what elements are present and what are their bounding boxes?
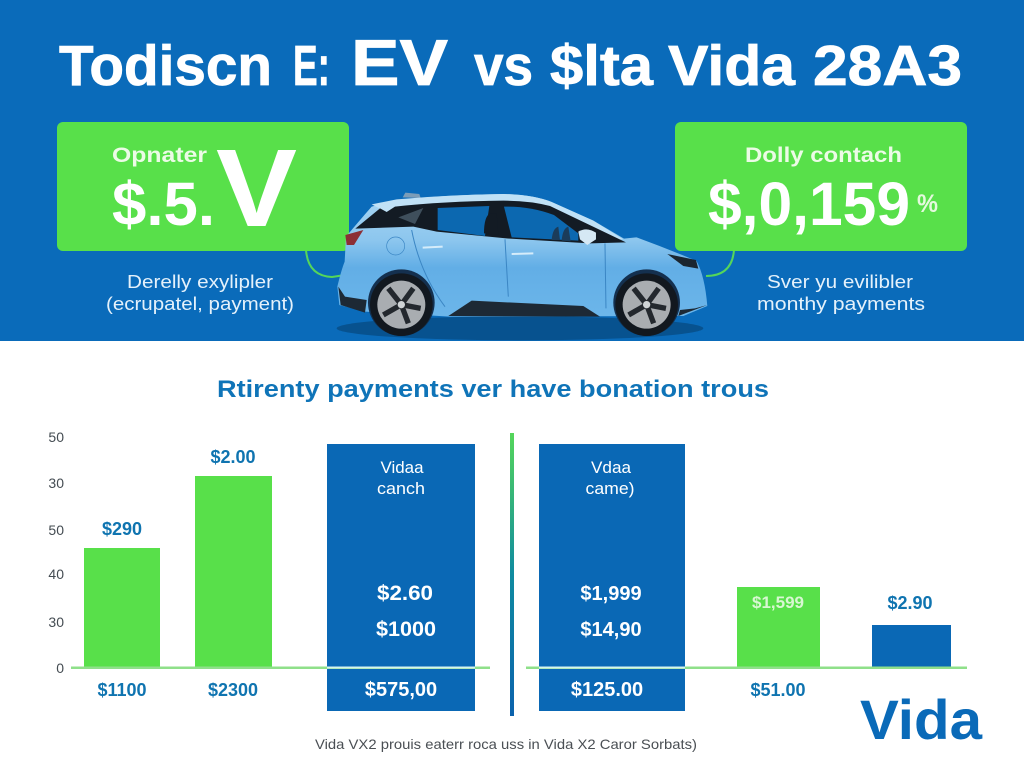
title: Vida [668,34,796,98]
right baseline [526,666,967,669]
baseline across blue bar [327,666,475,668]
callout label: Dolly contach: Dolly contach [745,144,902,167]
panel: right callout [675,122,967,251]
callout label: Opnater: Opnater [112,144,207,167]
y axis labels: 50 [48,429,64,445]
blue bar labels: $575,00 [365,679,437,701]
bar chart: right: $2.90 [887,593,933,613]
bar: blue $2.90 [872,625,951,668]
car roof highlight [372,194,623,239]
chart heading: Rtirenty payments ver have bonation trous [217,376,769,403]
illustration: blue electric car [337,193,707,340]
rear wheel [368,269,435,336]
tail light [345,230,363,245]
footnote: Vida VX2 prouis eaterr roca uss in Vida X2 Caror Sorbats) [315,736,697,752]
value labels: $1100 [97,680,147,700]
car body [337,194,707,317]
rear seat silhouette [484,213,498,235]
title: $lta [550,34,654,98]
blue bar labels: $1,999 [580,583,642,605]
bar: green $2.00 [195,476,272,668]
bar: blue Vida canch [327,444,475,711]
value labels: $2.00 [210,447,256,467]
callout value: $,0,159: $,0,159 [708,170,910,238]
title: vs [474,34,533,98]
blue bar labels: Vdaa [591,458,632,477]
y axis labels: 40 [48,566,64,582]
y axis labels: 50 [48,522,64,538]
bar chart: right: $51.00 [750,680,806,700]
left baseline [71,666,490,669]
title: EV [351,26,448,99]
baseline across blue bar [539,666,685,668]
text block: right caption: Sver yu evilibler [767,271,913,292]
bar chart: left [71,444,490,711]
car roof antenna [403,193,421,198]
blue bar labels: $2.60 [377,582,433,605]
blue bar labels: $1000 [376,618,436,641]
front door window [504,207,578,241]
callout value: $.5.V: V [216,127,297,250]
bar: green $290 [84,548,160,668]
title: 28A3 [813,34,962,98]
rear bumper [338,287,367,313]
door seams and handles [387,230,606,308]
blue bar labels: Vidaa [380,458,424,477]
blue bar labels: canch [377,479,425,498]
text block: left caption: (ecrupatel, payment) [106,293,294,314]
text block: right caption [757,271,925,314]
text block: right caption: monthy payments [757,293,925,314]
callout value: $.5.V [112,127,297,250]
y axis labels: 0 [56,660,64,676]
panel: left callout [57,122,349,251]
car rear dark glass and window band [355,201,626,243]
blue bar labels: $125.00 [571,679,643,701]
value labels: $1,599 [752,593,804,612]
connector: right callout to car [706,250,734,276]
side mirror [578,229,596,245]
rear quarter window [398,208,423,224]
title: Todiscn [59,34,272,98]
callout value: $.5.V: $.5. [112,170,215,238]
title: E: [293,34,330,98]
front wheel [613,269,680,336]
text block: left caption [106,271,294,314]
rear door window [438,206,489,236]
y axis labels [48,429,64,676]
callout percent sign: % [917,190,938,218]
blue bar labels: came) [586,479,634,498]
title [59,26,962,99]
headlight [667,254,698,269]
bar: green $1,599 [737,587,820,668]
side sill [448,301,600,317]
header band [0,0,1024,341]
blue bar labels: $14,90 [580,619,642,641]
y axis labels: 30 [48,614,64,630]
center divider [510,433,514,716]
bar chart: right [526,444,967,711]
text block: left caption: Derelly exylipler [127,271,273,292]
connector: left callout to car [306,250,345,277]
logo: Vida: Vida [860,688,983,751]
value labels: $2300 [208,680,258,700]
y axis labels: 30 [48,475,64,491]
front seat silhouettes [552,227,571,241]
car ground shadow [337,316,703,340]
bar: blue Vidaa came [539,444,685,711]
value labels: $290 [102,519,142,539]
value labels [97,447,258,700]
front bumper [678,305,707,316]
blue bar labels [365,458,437,701]
blue bar labels [571,458,643,701]
